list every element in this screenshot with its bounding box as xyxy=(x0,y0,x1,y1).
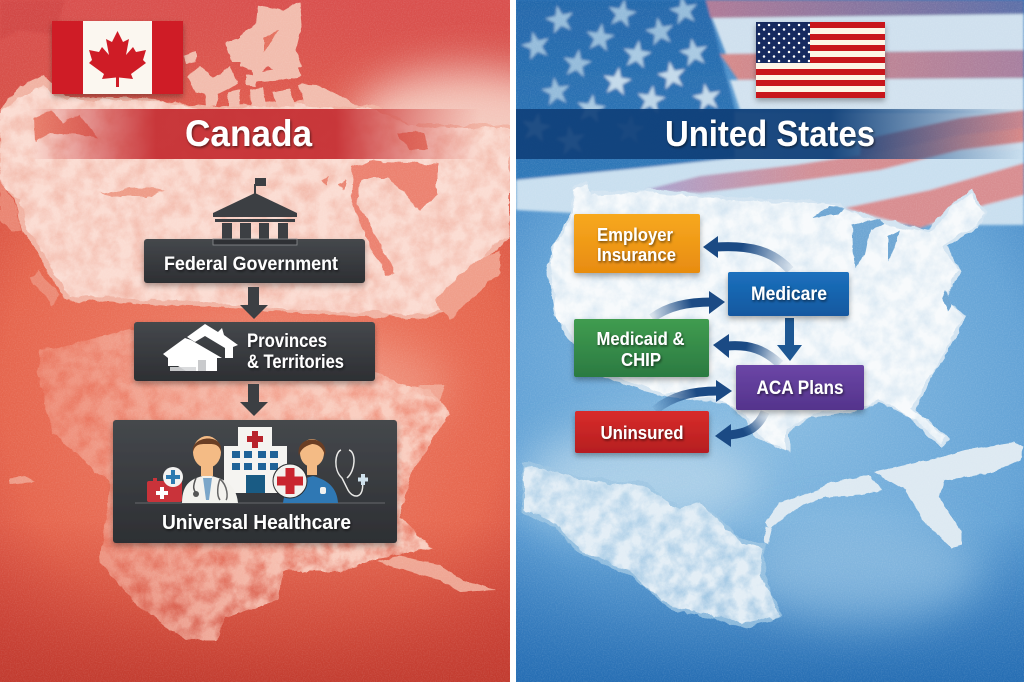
arrow: ACA Plans to Medicaid xyxy=(713,334,780,364)
flag: United States xyxy=(756,22,885,98)
box: Federal Government: Federal Government xyxy=(164,254,339,275)
box: Provinces and Territories: Provinces xyxy=(247,331,327,352)
box: Provinces and Territories: & Territories xyxy=(247,352,344,373)
icon: houses xyxy=(163,324,238,371)
box: Universal Healthcare xyxy=(113,420,397,543)
box: Medicaid and CHIP xyxy=(574,319,709,377)
icon: medical kit xyxy=(147,467,183,502)
icon: red cross badge xyxy=(273,464,307,498)
panel: United States xyxy=(516,0,1024,682)
arrow: federal to provinces xyxy=(240,287,268,319)
heading banner: Canada xyxy=(30,109,480,159)
Great Lakes xyxy=(812,206,952,312)
arrow: Uninsured to ACA Plans xyxy=(655,380,732,410)
box: Employer Insurance xyxy=(574,214,700,273)
Arctic islands xyxy=(184,2,358,107)
lakes and bays xyxy=(0,110,500,320)
icon: doctor xyxy=(182,436,238,503)
map of Canada xyxy=(0,2,510,320)
icon: stethoscope xyxy=(336,450,368,496)
arrow: Medicaid to Medicare xyxy=(652,291,725,318)
flow diagram: Canada xyxy=(113,178,397,543)
US background xyxy=(516,0,1024,682)
arrow: provinces to universal healthcare xyxy=(240,384,268,416)
icon: government building xyxy=(213,178,297,239)
map of United States xyxy=(522,182,1024,628)
box: ACA Plans xyxy=(736,365,864,410)
icon: nurse xyxy=(283,439,338,503)
Mexico and Gulf coast shapes xyxy=(522,442,1024,628)
panel: Canada xyxy=(0,0,510,682)
arrow: ACA Plans to Uninsured xyxy=(715,412,765,447)
box: Universal Healthcare: Universal Healthcare xyxy=(162,512,351,534)
box: Medicaid and CHIP: CHIP xyxy=(621,350,661,370)
heading banner: United States xyxy=(516,109,1024,159)
lower map texture xyxy=(10,330,495,641)
box: Federal Government xyxy=(144,239,365,283)
box: Uninsured xyxy=(575,411,709,453)
icon: hospital xyxy=(224,427,287,493)
box: Uninsured: Uninsured xyxy=(600,423,684,443)
heading text: United States: United States xyxy=(665,113,875,154)
box: Medicare: Medicare xyxy=(751,284,827,305)
flow diagram: United States xyxy=(574,214,864,453)
box: Medicare xyxy=(728,272,849,316)
box: Medicaid and CHIP: Medicaid & xyxy=(596,329,684,349)
arrow: Medicare to Employer Insurance xyxy=(703,236,790,270)
stars on background flag xyxy=(518,0,723,155)
box: Employer Insurance: Employer xyxy=(597,225,673,245)
background: waving American flag xyxy=(516,0,1024,228)
box: Provinces and Territories xyxy=(134,322,375,381)
Canada background xyxy=(0,0,510,682)
box: ACA Plans: ACA Plans xyxy=(756,378,844,399)
heading text: Canada: Canada xyxy=(185,113,312,154)
arrow: Medicare to ACA Plans xyxy=(777,318,802,361)
flag: Canada xyxy=(52,21,183,94)
box: Employer Insurance: Insurance xyxy=(597,245,676,265)
